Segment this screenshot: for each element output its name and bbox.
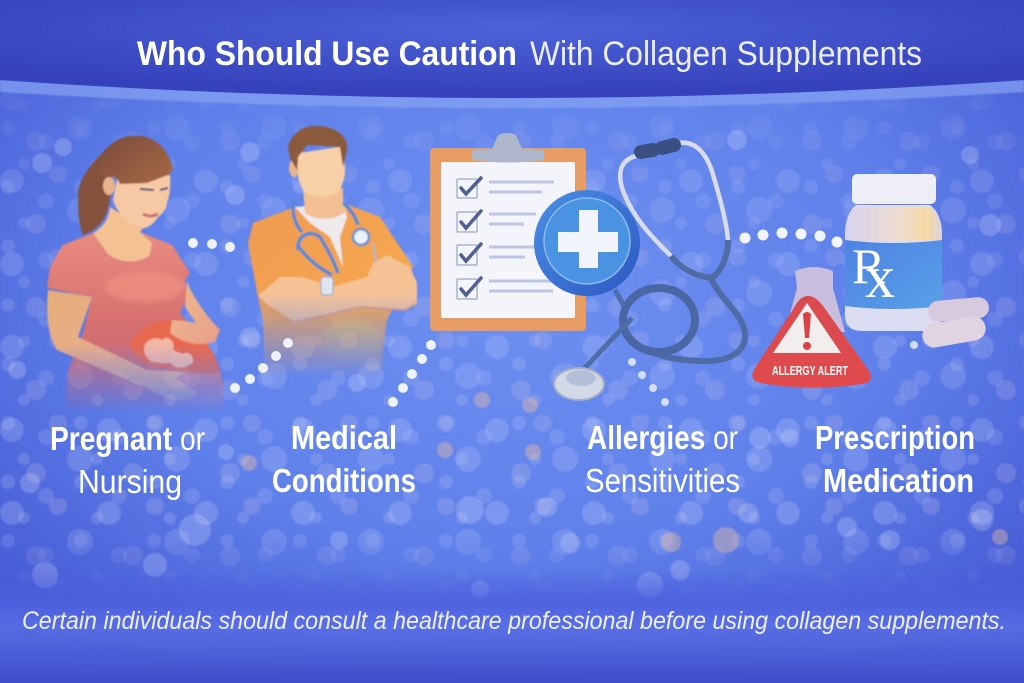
belly: [130, 320, 220, 378]
tube loop: [623, 288, 695, 352]
white triangle: [773, 303, 841, 353]
shirt: [47, 232, 223, 410]
stem: [581, 290, 632, 372]
rx subscript: x: [865, 244, 895, 310]
label: pregnant or nursing: [50, 420, 205, 500]
crossed arms: [258, 255, 417, 322]
label: medical conditions: Conditions: [272, 462, 416, 499]
ponytail: [78, 152, 112, 235]
yellow glow: [324, 321, 379, 346]
cap: [852, 174, 936, 204]
tube lower: [650, 240, 745, 361]
board: [430, 148, 586, 331]
flask: [785, 267, 845, 332]
bust highlight: [105, 272, 185, 302]
ear: [289, 159, 299, 177]
rx symbol: R: [852, 238, 886, 294]
exclamation mark: [803, 312, 811, 338]
icon: medical cross disc: [534, 190, 640, 296]
figure: pregnant woman: [47, 136, 224, 410]
icon: allergy alert: [752, 267, 871, 388]
title: [137, 35, 922, 73]
icon: stethoscope: [554, 143, 745, 400]
icon: prescription bottle: [845, 174, 942, 331]
baby silhouette small: [170, 352, 193, 368]
neck and chest: [93, 207, 152, 262]
t-shirt: [295, 203, 347, 267]
chest piece: [554, 368, 604, 400]
arm shading: [295, 303, 417, 322]
dotted connector: center: [388, 340, 436, 407]
icon: clipboard checklist: [430, 133, 586, 331]
small dots: [628, 341, 918, 406]
red triangle: [752, 296, 871, 388]
ear: [103, 177, 115, 195]
chest piece: [353, 229, 369, 245]
label: allergies or sensitivities: [585, 419, 740, 499]
exclamation dot: [803, 342, 811, 350]
right arm and hand: [170, 281, 220, 344]
label: pregnant or nursing: Pregnant or: [50, 420, 205, 457]
bottle body: [845, 205, 942, 331]
check boxes: [457, 179, 477, 299]
head: [298, 147, 345, 197]
baby silhouette: [144, 338, 179, 363]
header banner: [0, 0, 1024, 108]
tube upper: [620, 155, 671, 256]
dotted connector: pregnant to medical: [188, 238, 235, 252]
ear tips: [641, 145, 674, 152]
alert text: ALLERGY ALERT: [772, 364, 848, 378]
label: medical conditions: [272, 419, 416, 499]
title: With Collagen Supplements: [530, 35, 922, 73]
left arm: [47, 290, 198, 401]
face: [113, 175, 170, 228]
paper: [441, 162, 575, 318]
list lines: [489, 182, 554, 291]
title: Who Should Use Caution: [137, 35, 517, 73]
hair: [288, 126, 347, 170]
check marks: [461, 178, 481, 295]
label: allergies or sensitivities: Sensitivities: [585, 462, 740, 499]
label: allergies or sensitivities: Allergies or: [587, 419, 738, 456]
label: pregnant or nursing: Nursing: [78, 463, 182, 500]
mouth: [143, 214, 158, 216]
dotted connector: medical to conditions: [230, 338, 293, 393]
label: [845, 240, 942, 309]
clip: [472, 133, 544, 162]
label: medical conditions: Medical: [291, 419, 397, 456]
bokeh accents: [8, 130, 1001, 599]
label: prescription medication: Medication: [823, 462, 974, 499]
scrubs: [248, 203, 413, 375]
icon: capsules: [920, 296, 990, 349]
dotted connector: stethoscope to bottle: [740, 228, 842, 248]
watch: [321, 277, 333, 295]
stethoscope: [293, 200, 376, 275]
eye: [140, 188, 168, 190]
lower belly: [176, 372, 222, 390]
figure: medical professional: [248, 126, 417, 375]
shoulder: [845, 207, 942, 242]
label: prescription medication: [815, 419, 975, 499]
neck: [303, 188, 347, 219]
label: prescription medication: Prescription: [815, 419, 975, 456]
hair: [101, 136, 173, 184]
